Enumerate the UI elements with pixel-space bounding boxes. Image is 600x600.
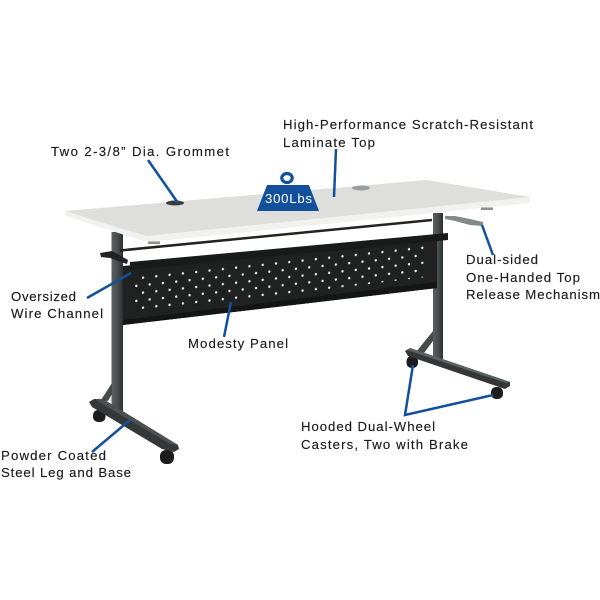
weight icon: 300Lbs: 300Lbs [265,191,312,206]
callout: casters: Casters, Two with Brake [301,437,468,452]
callout: release mechanism [466,225,600,302]
callout: release mechanism: One-Handed Top [466,270,580,285]
table top surface [65,180,530,236]
callout: steel leg and base [1,420,131,480]
callout: wire channel [11,273,131,321]
modesty panel [123,236,437,325]
callout: wire channel: Wire Channel [11,306,103,321]
table top edge [65,197,530,242]
callout: laminate top [283,117,533,197]
underside pads [148,208,493,244]
callout: casters [301,365,493,452]
left foot [89,399,179,452]
grommet left [166,200,184,206]
release handle [445,216,483,226]
callout: modesty panel: Modesty Panel [188,336,288,351]
desk [65,180,530,464]
callout: wire channel: Oversized [11,289,76,304]
callout: release mechanism: Release Mechanism [466,287,600,302]
callout: grommet [51,144,229,203]
callout: modesty panel [188,302,288,351]
callout: laminate top: Laminate Top [283,135,375,150]
right leg [416,213,443,360]
callout: steel leg and base: Steel Leg and Base [1,465,131,480]
callout: steel leg and base: Powder Coated [1,448,106,463]
left caster wheels [93,410,174,464]
weight icon: 300Lbs [257,174,319,211]
panel top bar [130,233,448,270]
right caster wheels [406,356,503,399]
callout: casters: Hooded Dual-Wheel [301,419,435,434]
left leg [101,232,123,413]
wire channel rod [120,220,432,250]
grommet right [352,186,370,190]
callout: release mechanism: Dual-sided [466,252,538,267]
wire channel bracket [100,251,128,264]
callout: laminate top: High-Performance Scratch-Resistant [283,117,533,132]
right foot [405,348,510,389]
callout: grommet: Two 2-3/8” Dia. Grommet [51,144,229,159]
